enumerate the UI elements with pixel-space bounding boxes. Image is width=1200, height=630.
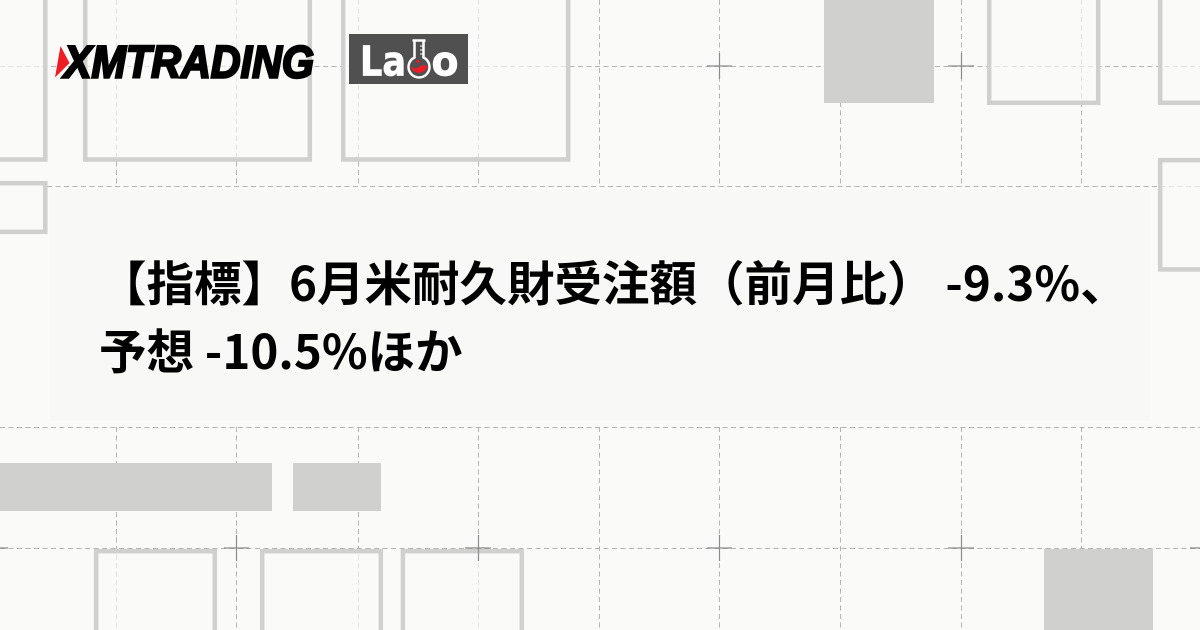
panel: title background	[50, 190, 1150, 421]
logo: Lab	[349, 34, 468, 84]
title: 【指標】6月米耐久財受注額（前月比） -9.3%、	[99, 246, 1128, 315]
title	[99, 246, 1128, 383]
icon: flask	[408, 40, 430, 77]
title: 予想 -10.5%ほか	[99, 314, 463, 383]
icon: red arrow	[55, 46, 70, 78]
logo: XMTRADING	[55, 43, 314, 81]
